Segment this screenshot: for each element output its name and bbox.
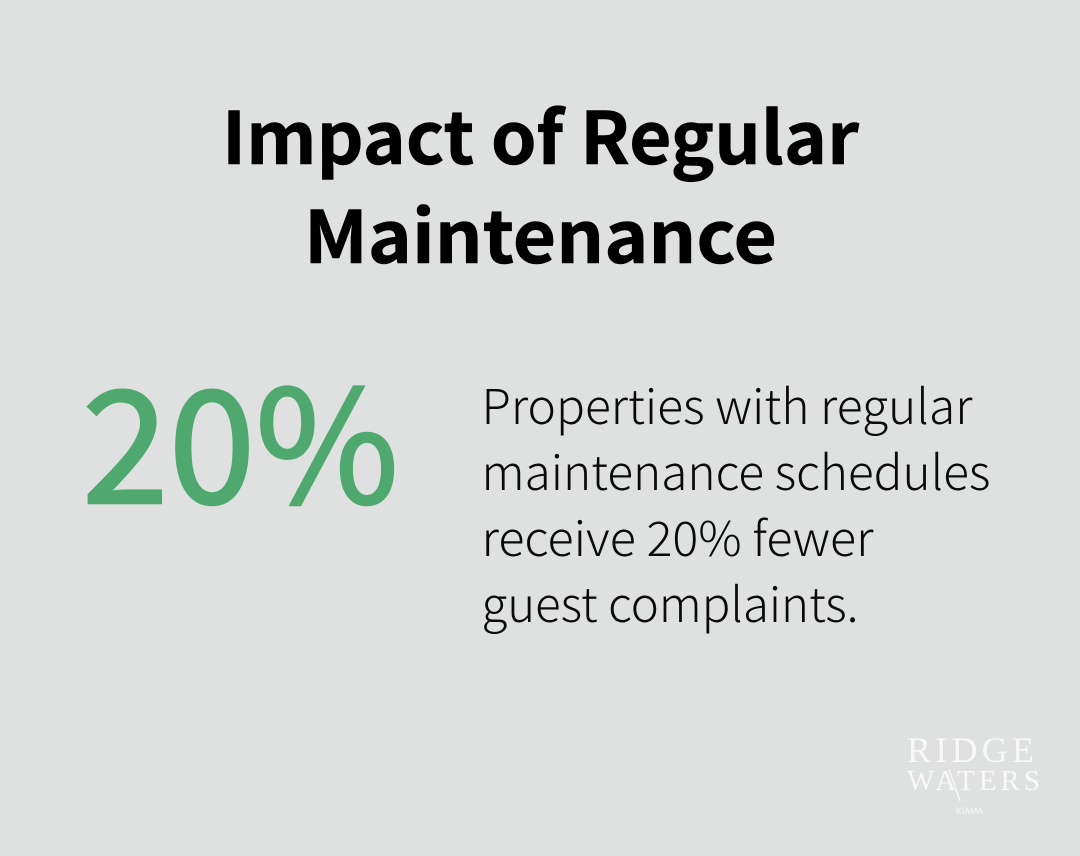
title: [222, 80, 860, 284]
stat description: maintenance schedules: [482, 434, 990, 504]
logo: Ridge Waters Kiama: RIDGE: [907, 730, 1034, 770]
stat description: [482, 368, 990, 636]
logo: Ridge Waters Kiama: KIAMA: [956, 806, 983, 816]
logo: Ridge Waters Kiama: WATERS: [907, 765, 1040, 797]
logo: Ridge Waters Kiama: [907, 730, 1040, 816]
title: Maintenance: [304, 179, 777, 284]
stat description: Properties with regular: [482, 368, 973, 438]
stat description: guest complaints.: [482, 566, 858, 636]
title: Impact of Regular: [222, 80, 860, 185]
stat description: receive 20% fewer: [482, 500, 874, 570]
big stat: 20%: 20%: [82, 322, 399, 548]
